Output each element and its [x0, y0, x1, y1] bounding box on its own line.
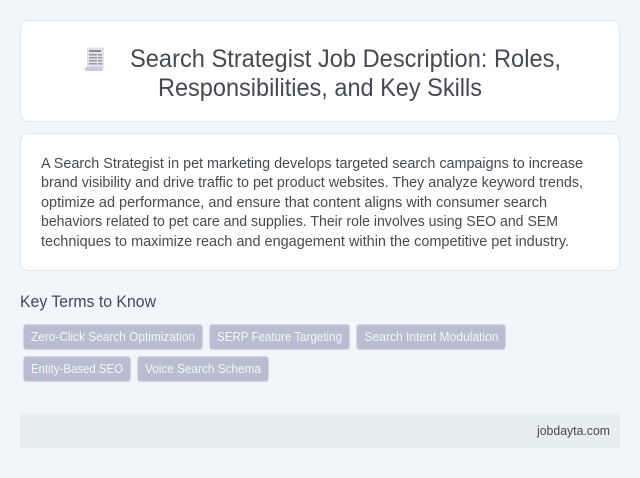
- footer: [20, 414, 620, 448]
- text block: description: A Search Strategist in pet marketing develops targeted search campaigns to increase: [41, 155, 583, 172]
- tag: zero-click search optimization: Zero-Click Search Optimization: [31, 330, 195, 344]
- title: Responsibilities, and Key Skills: [158, 74, 482, 102]
- title: [130, 45, 561, 102]
- icon: document scroll: [84, 47, 104, 71]
- text block: description: techniques to maximize reach and engagement within the competitive pet industry.: [41, 233, 569, 250]
- text block: description: [41, 155, 583, 250]
- footer: jobdayta.com: [536, 424, 610, 438]
- tag: zero-click search optimization: [24, 324, 202, 350]
- tag: search intent modulation: [356, 324, 506, 350]
- tag: entity-based seo: [24, 356, 130, 382]
- title: Search Strategist Job Description: Roles,: [130, 45, 561, 73]
- tag: voice search schema: Voice Search Schema: [145, 362, 261, 376]
- tag: voice search schema: [138, 356, 268, 382]
- panel: description: [20, 134, 620, 270]
- tag: entity-based seo: Entity-Based SEO: [31, 362, 123, 376]
- heading: key terms: Key Terms to Know: [20, 293, 156, 311]
- text block: description: optimize ad performance, and ensure that content aligns with consumer search: [41, 194, 547, 211]
- tag: search intent modulation: Search Intent Modulation: [364, 330, 498, 344]
- tag: serp feature targeting: [210, 324, 350, 350]
- text block: description: brand visibility and drive traffic to pet product websites. They analyze keyword trends,: [41, 174, 583, 191]
- panel: title card: [20, 20, 620, 122]
- text block: description: behaviors related to pet care and supplies. Their role involves using SEO and SEM: [41, 213, 558, 230]
- tag: serp feature targeting: SERP Feature Targeting: [217, 330, 342, 344]
